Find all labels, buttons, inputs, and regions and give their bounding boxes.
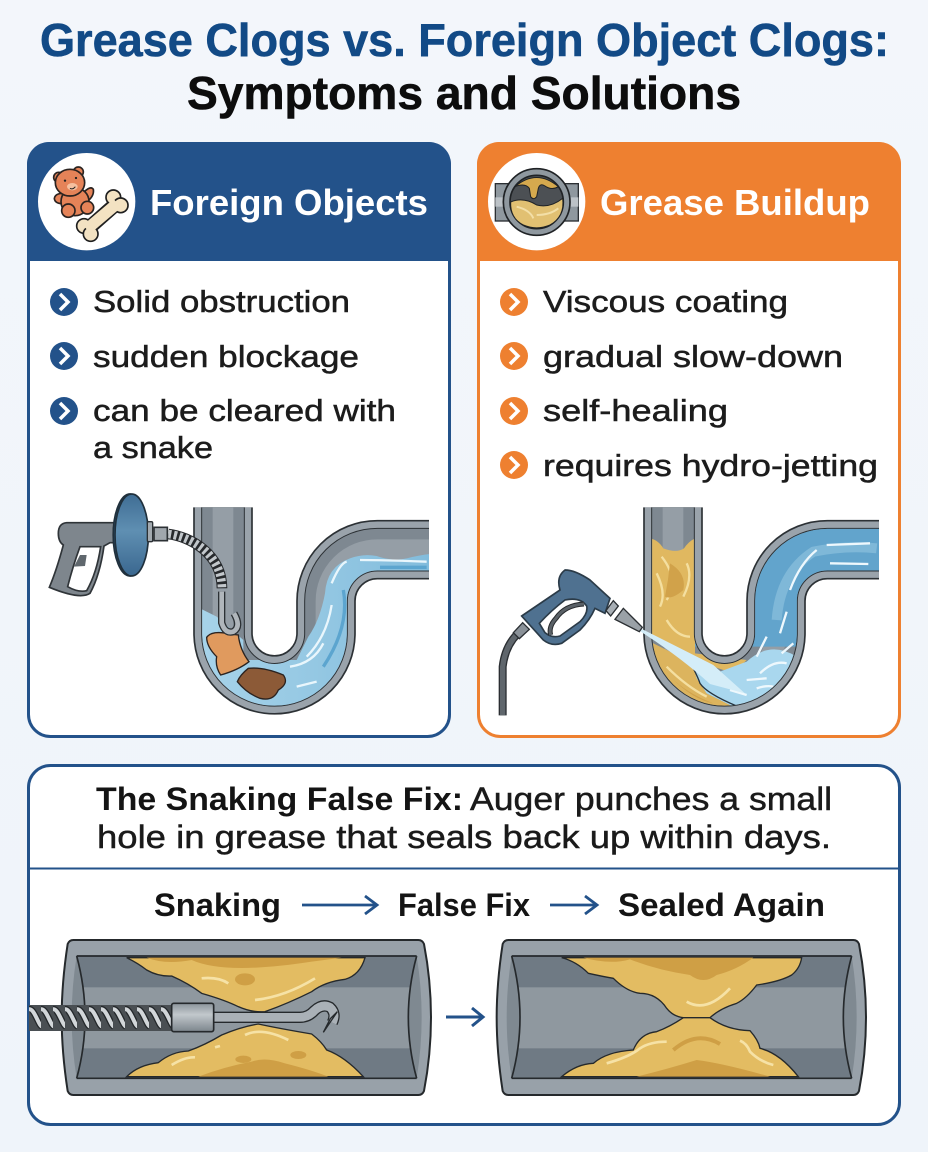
bullet list: gradual slow-down bbox=[543, 339, 843, 374]
icon: greasy pipe cross-section bbox=[488, 153, 585, 250]
step sequence: False Fix: False Fix bbox=[398, 887, 530, 923]
bullet list: a snake bbox=[93, 430, 213, 465]
header label: Foreign Objects bbox=[150, 182, 428, 223]
illustration: auger through grease bbox=[29, 940, 431, 1095]
icon: teddy bear and bone bbox=[38, 153, 135, 250]
arrow bbox=[302, 896, 377, 914]
bullet list: Solid obstruction bbox=[93, 284, 350, 319]
grease mass bottom bbox=[127, 1024, 363, 1077]
bullet list bbox=[50, 284, 396, 465]
auger head and hook bbox=[172, 1003, 337, 1032]
explanation text: The Snaking False Fix: bbox=[96, 781, 463, 817]
bullet list: self-healing bbox=[543, 393, 728, 428]
panel body bbox=[28, 766, 900, 1124]
bullet list: can be cleared with bbox=[93, 393, 396, 428]
panel body bbox=[478, 144, 900, 736]
arrow between stages bbox=[446, 1008, 483, 1026]
explanation text: Auger punches a small bbox=[470, 781, 832, 817]
trap pipe bbox=[223, 507, 429, 685]
title: Grease Clogs vs. Foreign Object Clogs: bbox=[40, 14, 889, 66]
panel body bbox=[28, 144, 450, 736]
illustration: drain snake in P-trap bbox=[49, 494, 430, 720]
sealed grease plug bbox=[562, 958, 802, 1077]
step sequence: Sealed Again: Sealed Again bbox=[618, 887, 825, 923]
panel: grease buildup bbox=[477, 142, 901, 736]
bullet list: Viscous coating bbox=[543, 284, 788, 319]
foreign object: sponge bbox=[207, 633, 249, 675]
illustration: grease sealed again bbox=[497, 940, 866, 1095]
water jet bbox=[641, 628, 745, 693]
snake coil bbox=[168, 534, 238, 632]
bullet list bbox=[500, 284, 878, 483]
auger coil bbox=[29, 1005, 172, 1031]
trap pipe bbox=[673, 507, 879, 685]
illustration: hydro-jetting P-trap bbox=[503, 507, 880, 720]
foreign object: rock bbox=[237, 668, 285, 699]
step sequence: Snaking: Snaking bbox=[154, 887, 281, 923]
panel: snaking false fix bbox=[28, 766, 900, 1124]
bullet list: sudden blockage bbox=[93, 339, 359, 374]
drain auger tool bbox=[49, 494, 167, 596]
panel: foreign objects bbox=[27, 142, 451, 736]
explanation text: hole in grease that seals back up within days. bbox=[97, 819, 831, 855]
bullet list: requires hydro-jetting bbox=[543, 448, 878, 483]
pipe body bbox=[62, 940, 431, 1095]
panel header bbox=[477, 142, 901, 261]
pipe body bbox=[497, 940, 866, 1095]
panel header bbox=[27, 142, 451, 261]
title bbox=[40, 14, 889, 119]
water bbox=[202, 554, 429, 706]
explanation text bbox=[96, 781, 832, 855]
arrow bbox=[550, 896, 597, 914]
water and grease bbox=[652, 528, 879, 706]
title: Symptoms and Solutions bbox=[187, 67, 741, 119]
header label: Grease Buildup bbox=[600, 182, 870, 223]
grease mass top bbox=[127, 958, 365, 1012]
pressure washer gun and hose bbox=[503, 570, 642, 715]
